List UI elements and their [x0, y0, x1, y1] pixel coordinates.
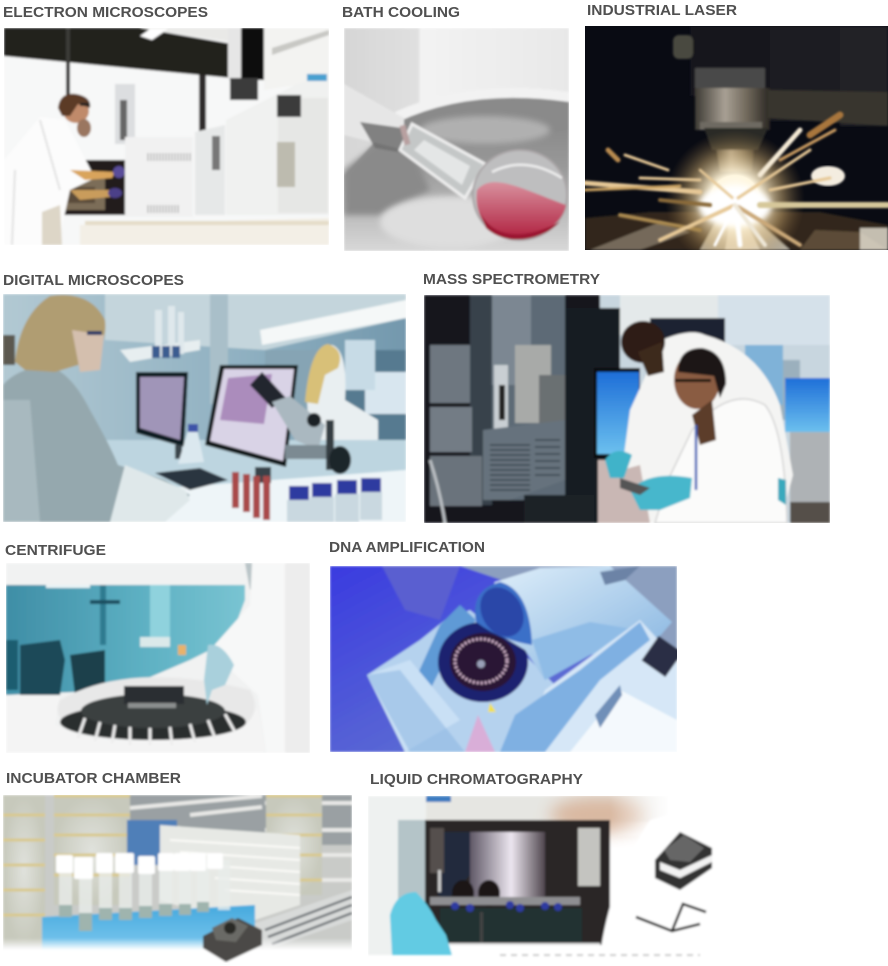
tube box — [127, 820, 177, 865]
black angled part — [636, 904, 706, 931]
photo: incubator chamber — [3, 795, 352, 963]
white swoosh over right side — [600, 800, 720, 955]
photo: centrifuge — [6, 563, 310, 753]
lab coat arm — [210, 563, 310, 753]
vials — [232, 472, 270, 520]
sample tubes — [59, 860, 230, 930]
small monitor — [136, 372, 188, 447]
heading: electron microscopes: ELECTRON MICROSCOPES — [3, 5, 208, 21]
cropped caption remnant — [500, 954, 700, 956]
gloves — [605, 451, 632, 478]
heading: incubator chamber: INCUBATOR CHAMBER — [6, 771, 182, 787]
photo: bath cooling — [344, 28, 569, 251]
photo: digital microscopes — [3, 294, 406, 522]
photo: DNA amplification — [330, 566, 677, 752]
front housing — [520, 620, 677, 752]
instrument interior — [425, 820, 610, 945]
machine body — [367, 610, 560, 752]
photo: industrial laser — [585, 26, 888, 250]
chip module — [203, 918, 262, 962]
heading: liquid chromatography: LIQUID CHROMATOGRAPHY — [370, 772, 583, 788]
flask — [178, 424, 204, 464]
keyboard — [155, 468, 228, 490]
heading: bath cooling: BATH COOLING — [342, 5, 460, 21]
first scientist in lab coat — [622, 332, 793, 523]
gloved hand — [372, 892, 452, 955]
warning label — [578, 828, 600, 886]
culture dish stacks — [3, 795, 45, 945]
sample tray — [430, 897, 580, 905]
large monitor — [205, 365, 298, 467]
base — [6, 695, 265, 753]
scientist with blond hair — [3, 365, 190, 522]
heading: DNA amplification: DNA AMPLIFICATION — [329, 540, 485, 556]
chip stack — [655, 832, 712, 890]
teal window — [6, 585, 245, 695]
blue rack — [42, 905, 255, 950]
heading: centrifuge: CENTRIFUGE — [5, 543, 106, 559]
photo: mass spectrometry — [424, 295, 830, 523]
heading: mass spectrometry: MASS SPECTROMETRY — [423, 272, 600, 288]
gloved hand — [204, 645, 234, 705]
second scientist in lab coat — [655, 399, 787, 523]
microscope — [250, 372, 286, 408]
sparks radiating from the cut — [585, 115, 888, 245]
wire shelf — [250, 890, 352, 950]
photo: electron microscopes — [4, 28, 329, 245]
heading: industrial laser: INDUSTRIAL LASER — [587, 3, 738, 19]
lid — [475, 566, 672, 680]
heading: digital microscopes: DIGITAL MICROSCOPES — [3, 273, 184, 289]
bench — [90, 440, 406, 522]
clear plates — [160, 825, 300, 925]
photo: liquid chromatography — [368, 796, 714, 957]
rotor well — [438, 622, 528, 702]
